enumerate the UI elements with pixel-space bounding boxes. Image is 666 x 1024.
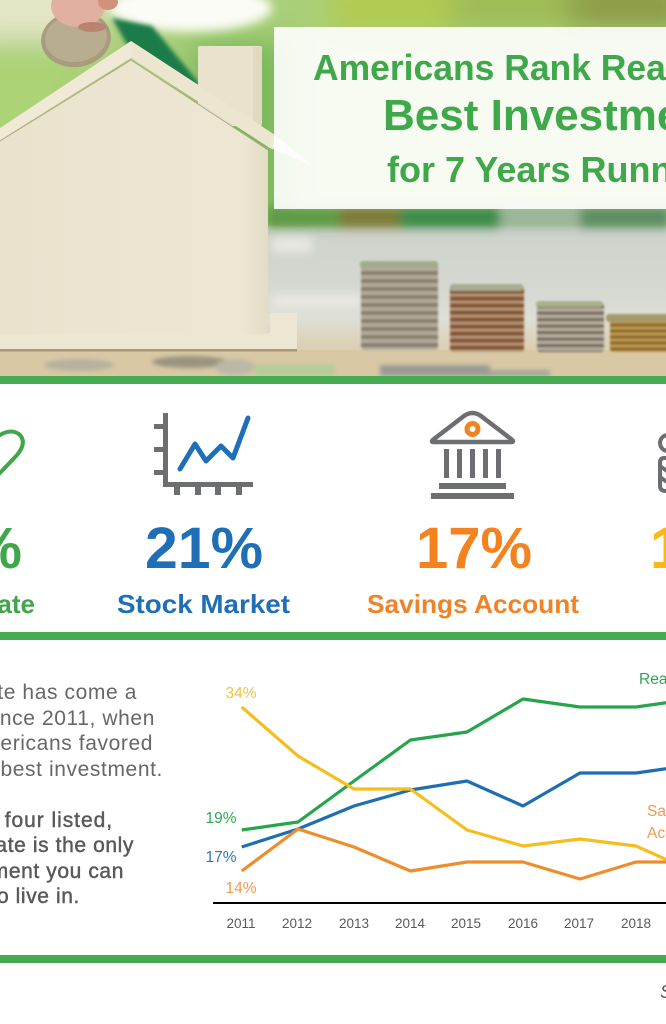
title panel [274,27,666,209]
year labels: 2015 [451,916,481,931]
savings label: Savings Account [367,589,579,619]
year labels: 2014 [395,916,426,931]
value label: real estate 19%: 19% [205,810,237,827]
coin stack 2 [450,284,524,352]
icon: coin stack [660,435,666,491]
value label: stocks 17%: 17% [205,849,237,866]
series: gold [242,707,666,871]
savings percent: 17% [416,516,532,581]
series: stock market [242,765,666,847]
chimney [198,46,262,126]
white sky patch [108,0,272,32]
hand dropping coin [37,0,118,72]
base plate [0,313,297,350]
dark foliage band under title [266,207,666,228]
icon: bank [431,413,514,499]
foreground coins and reflections [44,356,550,376]
year labels [226,916,666,931]
table foreground [0,350,666,376]
light road streaks [272,238,362,307]
stat: stock market [117,413,290,619]
ground [0,226,666,376]
coin stack 1 [360,261,438,350]
year labels: 2017 [564,916,594,931]
icon: stock chart [154,413,253,495]
year labels: 2013 [339,916,369,931]
green divider middle [0,632,666,640]
series: savings account [242,829,666,879]
dark tree [112,18,200,92]
hero photo: wooden house and coin stacks [0,0,666,376]
year labels: 2018 [621,916,651,931]
line chart [205,671,666,931]
blurred green foliage background [0,0,666,230]
year labels: 2016 [508,916,538,931]
coin stack 4 [606,314,666,352]
green divider bottom [0,955,666,963]
series: real estate [242,699,666,830]
stat: real estate [0,432,35,619]
value label: gold 34%: 34% [225,685,257,702]
wooden house [0,41,312,352]
green divider top [0,376,666,384]
text block: intro [0,681,163,781]
wall [0,60,268,334]
roof trim [0,41,312,165]
x axis [213,902,666,904]
year labels: 2012 [282,916,312,931]
icon: house heart [0,432,23,476]
stat: gold [650,435,666,581]
stat: savings account [367,413,579,619]
stock label: Stock Market [117,589,290,619]
year labels: 2011 [226,916,256,931]
value label: savings 14%: 14% [225,880,257,897]
stock percent: 21% [145,516,263,581]
coin stack 3 [536,301,604,352]
text block: takeaway [0,809,134,908]
